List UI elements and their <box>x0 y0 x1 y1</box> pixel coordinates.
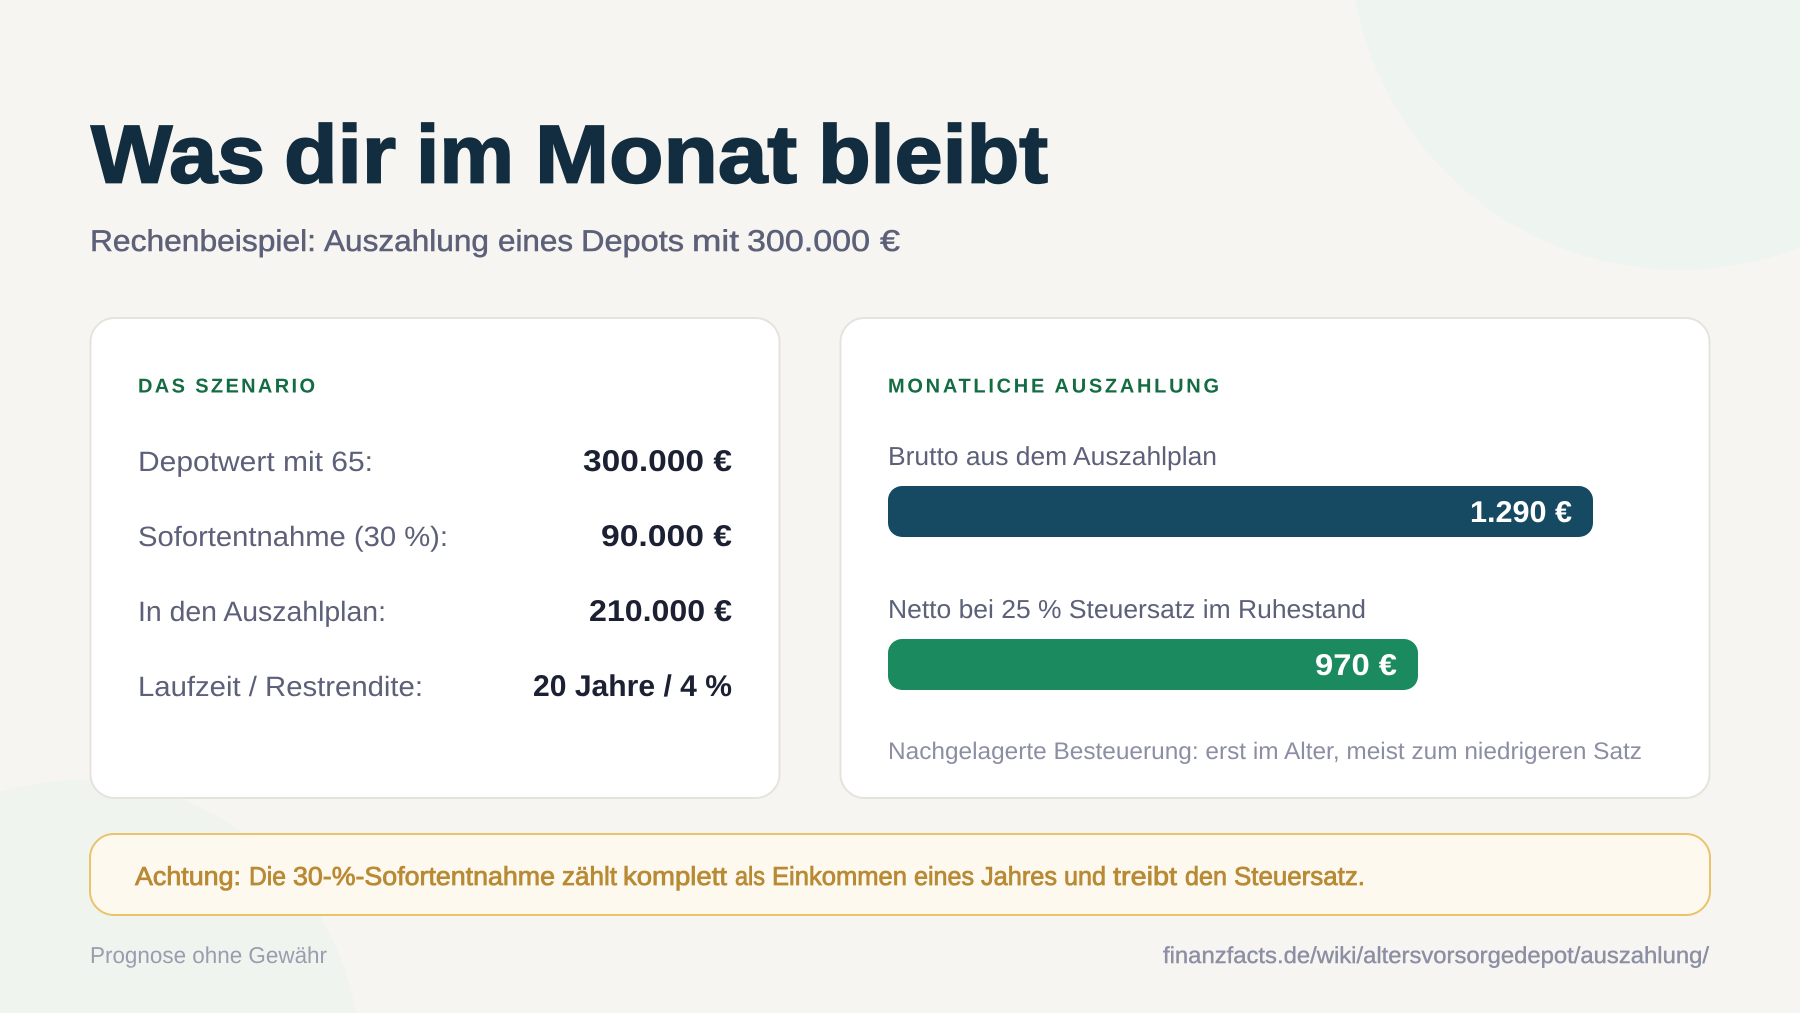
row: Auszahlplan: In den Auszahlplan: <box>138 596 386 627</box>
subtitle: Auszahlung <box>324 225 489 258</box>
row: Laufzeit: Laufzeit / Restrendite: <box>138 671 423 702</box>
title: bleibt <box>818 110 1048 200</box>
title: im <box>416 110 514 200</box>
callout text: Einkommen <box>772 861 907 891</box>
row: Depotwert: Depotwert mit 65: <box>138 446 373 477</box>
callout text: Steuersatz. <box>1234 861 1365 891</box>
callout text: treibt <box>1113 861 1178 891</box>
footer: disclaimer: Prognose ohne Gewähr <box>90 942 327 968</box>
subtitle: eines <box>498 225 573 258</box>
panel heading: MONATLICHE AUSZAHLUNG <box>888 376 1219 398</box>
card background <box>90 318 780 798</box>
title <box>91 110 1048 200</box>
row: Laufzeit <box>138 670 732 703</box>
subtitle <box>90 225 900 258</box>
panel: monatliche auszahlung <box>840 318 1710 798</box>
callout text: Jahres <box>981 861 1057 891</box>
subtitle: Depots <box>581 225 684 258</box>
label: brutto: Brutto aus dem Auszahlplan <box>888 441 1217 471</box>
callout text: zählt <box>562 861 618 891</box>
callout text: Die <box>249 861 286 891</box>
title: dir <box>284 110 396 200</box>
callout: warning <box>90 834 1710 915</box>
bar: brutto 1.290 € <box>888 486 1593 537</box>
callout text: den <box>1185 861 1227 891</box>
callout text: komplett <box>623 861 728 891</box>
callout text: und <box>1064 861 1106 891</box>
callout text <box>135 861 1365 891</box>
subtitle: € <box>880 225 900 258</box>
row: Laufzeit: 20 Jahre / 4 % <box>533 670 732 703</box>
row: Sofortentnahme <box>138 520 732 553</box>
callout text: als <box>735 861 765 891</box>
row: Auszahlplan: 210.000 € <box>589 595 732 628</box>
panel heading: DAS SZENARIO <box>138 376 315 398</box>
card background <box>840 318 1710 798</box>
bar: brutto 1.290 €: 1.290 € <box>1470 496 1572 529</box>
row: Depotwert: 300.000 € <box>583 445 732 478</box>
callout text: Achtung: <box>135 861 241 891</box>
footer: source url: finanzfacts.de/wiki/altersvorsorgedepot/auszahlung/ <box>1163 942 1710 968</box>
subtitle: 300.000 <box>747 225 870 258</box>
title: Monat <box>535 110 797 200</box>
callout text: eines <box>914 861 974 891</box>
bar: netto 970 € <box>888 639 1418 690</box>
row: Sofortentnahme: Sofortentnahme (30 %): <box>138 521 448 552</box>
row: Sofortentnahme: 90.000 € <box>601 520 732 553</box>
row: Auszahlplan <box>138 595 732 628</box>
title: Was <box>91 110 265 200</box>
label: netto: Netto bei 25 % Steuersatz im Ruhestand <box>888 594 1366 624</box>
bar: netto 970 €: 970 € <box>1315 649 1397 682</box>
subtitle: mit <box>692 225 740 258</box>
note: nachgelagerte Besteuerung: Nachgelagerte Besteuerung: erst im Alter, meist zum niedrigeren Satz <box>888 738 1642 765</box>
subtitle: Rechenbeispiel: <box>90 225 316 258</box>
callout text: 30-%-Sofortentnahme <box>293 861 555 891</box>
panel: das szenario <box>90 318 780 798</box>
row: Depotwert <box>138 445 732 478</box>
